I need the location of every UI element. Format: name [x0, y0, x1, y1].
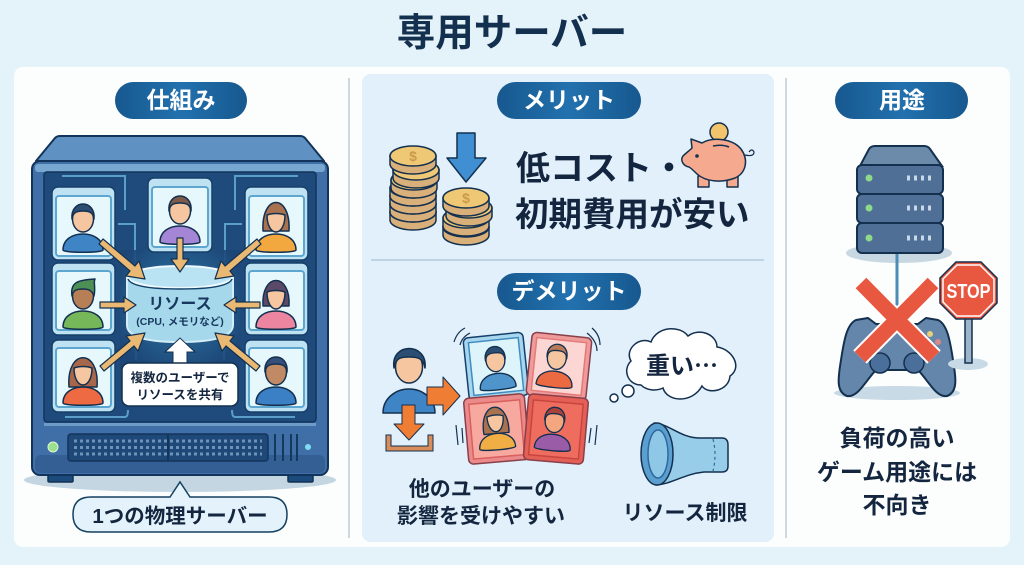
heading: メリット [497, 82, 641, 119]
resource cylinder [127, 266, 233, 342]
column dividers [349, 78, 786, 538]
circuit traces [62, 176, 298, 417]
text: affected by other users: 他のユーザーの [409, 478, 555, 501]
arrow: top-right to resource [215, 239, 261, 279]
text: affected by other users [397, 478, 565, 528]
server chassis [32, 136, 328, 482]
heading: デメリット: デメリット [512, 278, 626, 304]
arrow: middle-right to resource [224, 297, 260, 313]
user card 5 [245, 263, 308, 335]
callout: shared resources [122, 363, 238, 406]
icon: red cross [860, 283, 934, 357]
icon: game controller [834, 318, 960, 400]
user card 3 [245, 187, 308, 260]
heading: 仕組み [115, 82, 247, 119]
icon: server rack [846, 146, 952, 310]
affected user card: red left [463, 393, 530, 464]
label: CPU, メモリなど: (CPU, メモリなど) [136, 315, 224, 328]
arrow: shared callout up [165, 338, 195, 364]
icon: down arrow [447, 133, 486, 182]
heading: デメリット [497, 273, 641, 310]
shake marks [454, 328, 600, 445]
arrow: bottom-left to resource [100, 333, 145, 371]
arrow: orange down [394, 405, 424, 440]
icon: thought bubble [610, 329, 736, 402]
user card 2 [148, 178, 212, 252]
text: low cost: 初期費用が安い [515, 196, 750, 234]
heading: 仕組み: 仕組み [146, 87, 216, 113]
icon: green LED [48, 442, 58, 452]
icon: tall coin stack [390, 146, 439, 230]
section divider [371, 259, 764, 261]
icon: stop sign: STOP [946, 281, 990, 303]
arrow: orange right [427, 377, 460, 415]
affected user card: red right [523, 394, 589, 464]
text: low cost [515, 150, 750, 234]
text: affected by other users: 影響を受けやすい [397, 505, 565, 528]
text: unsuitable for game use: 負荷の高い [840, 425, 954, 451]
vent panel [68, 434, 297, 461]
panel: 用途 [817, 82, 997, 518]
arrow: bottom-right to resource [215, 333, 260, 371]
arrow: top-center to resource [171, 238, 189, 272]
user card 7 [245, 340, 308, 412]
inner glow [120, 250, 240, 370]
icon: tall coin stack: $ [409, 148, 417, 164]
affected user card: blue [463, 332, 529, 401]
heading: 用途: 用途 [879, 87, 925, 113]
text: unsuitable for game use [817, 425, 977, 518]
user card 6 [52, 340, 115, 412]
callout: 1つの物理サーバー: 1つの物理サーバー [92, 505, 268, 528]
icon: stop sign [940, 262, 997, 370]
callout: shared resources: リソースを共有 [137, 387, 223, 402]
affected user card: pink [526, 332, 592, 401]
icon: tray [386, 435, 433, 451]
text: low cost: 低コスト・ [516, 150, 686, 188]
text: unsuitable for game use: 不向き [862, 492, 932, 518]
text: unsuitable for game use: ゲーム用途には [817, 459, 977, 485]
server shadow [24, 468, 336, 492]
panel: 仕組み [24, 82, 336, 532]
panel: merits and demerits [362, 74, 774, 542]
icon: thought bubble: 重い… [646, 346, 718, 381]
label: リソース: リソース [148, 296, 212, 313]
text: resource limit: リソース制限 [623, 502, 747, 525]
arrow: top-left to resource [99, 239, 145, 279]
heading: メリット: メリット [523, 87, 615, 113]
title: 専用サーバー [397, 12, 627, 55]
callout: shared resources: 複数のユーザーで [130, 370, 230, 385]
user card 4 [52, 263, 115, 335]
heading: 用途 [835, 82, 968, 119]
icon: blue LED [305, 444, 311, 450]
callout: 1つの物理サーバー [73, 482, 287, 532]
arrow: middle-left to resource [100, 297, 136, 313]
icon: bottleneck pipe [641, 423, 728, 485]
icon: piggy bank [682, 123, 754, 187]
user card 1 [52, 187, 115, 260]
icon: short coin stack [443, 188, 492, 245]
icon: short coin stack: $ [462, 190, 470, 206]
icon: heavy user [383, 348, 435, 413]
